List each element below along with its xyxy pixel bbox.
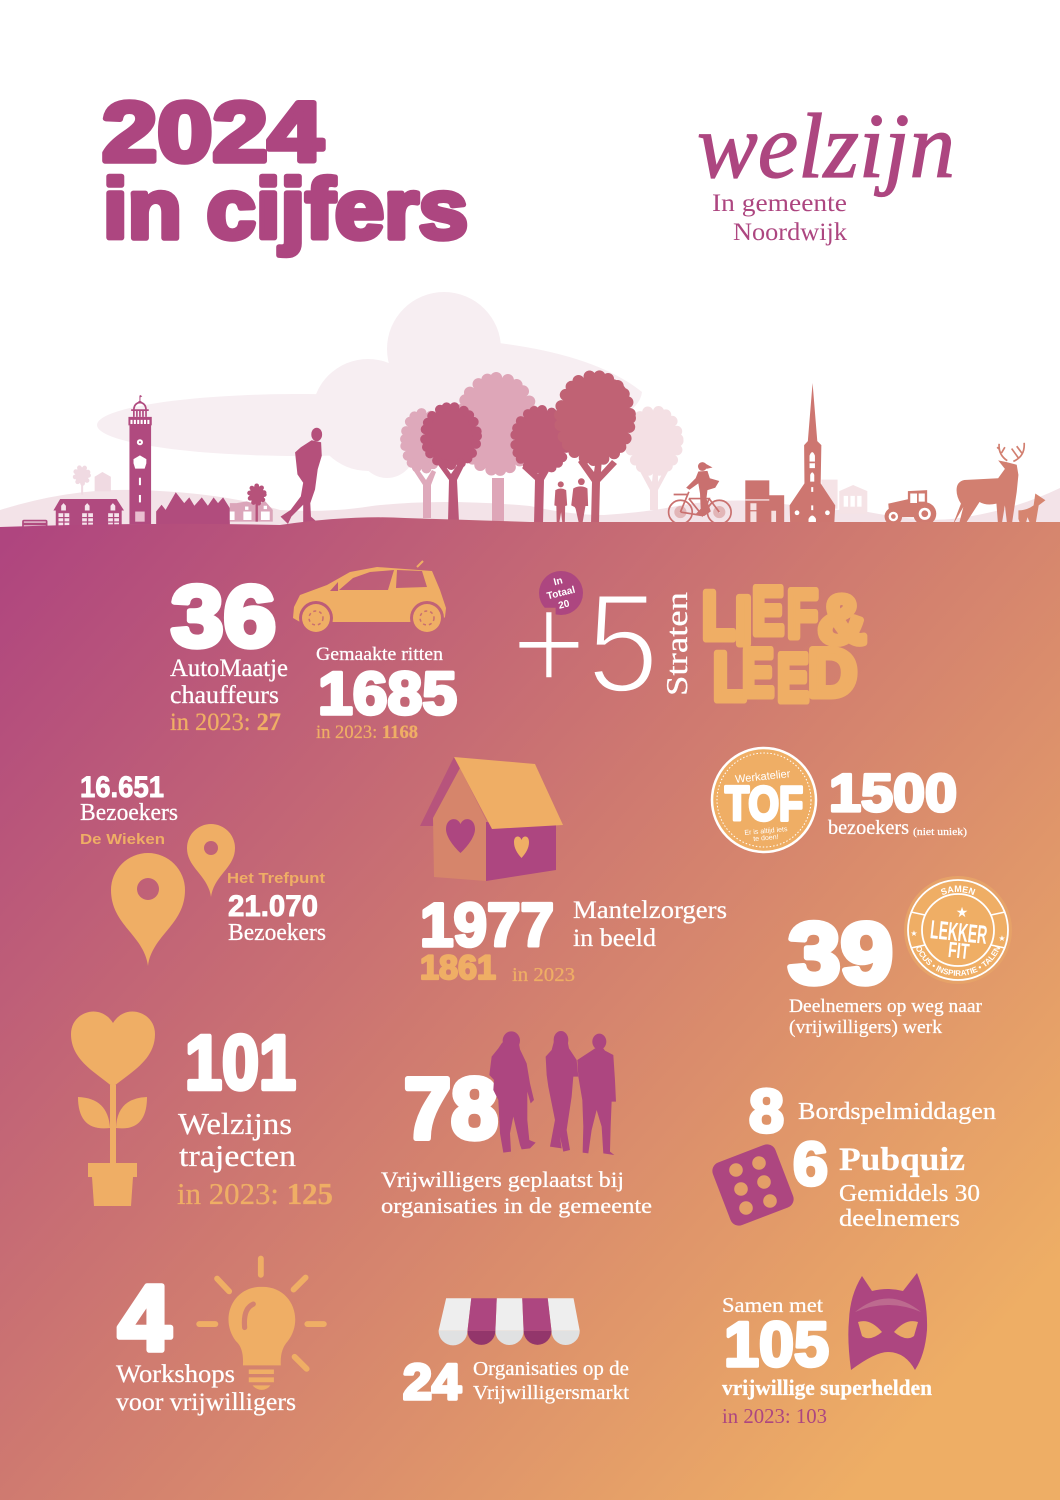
- deer: [952, 443, 1045, 526]
- logo: Lief & Leed: I: [735, 583, 752, 659]
- stat: 8 bordspelmiddagen: [749, 1077, 996, 1145]
- dark tree 3: [560, 376, 630, 524]
- badge: Werkatelier TOF: TOF: [725, 778, 803, 831]
- title: in cijfers: [103, 162, 468, 256]
- stat: 1977 mantelzorgers: 1861: [420, 949, 496, 987]
- stat: 39 deelnemers: Deelnemers op weg naar: [789, 996, 983, 1017]
- cloud: [97, 292, 642, 478]
- stat: 4 workshops: 4: [118, 1266, 171, 1370]
- dark tree 1: [425, 407, 477, 522]
- title: [102, 85, 468, 256]
- badge: Samen Lekker Fit: FOCUS • INSPIRATIE • TALENT: [916, 946, 1000, 976]
- stat: 4 workshops: [116, 1266, 296, 1416]
- badge: Samen Lekker Fit: FIT: [947, 937, 971, 964]
- stat: De Wieken: Bezoekers: [80, 800, 178, 826]
- stat: 24 organisaties: [403, 1354, 629, 1410]
- logo: Lief & Leed: L: [713, 639, 746, 715]
- stat: 105 superhelden: vrijwillige superhelden: [722, 1375, 932, 1400]
- icon: dice: [710, 1142, 796, 1228]
- dark tree 2: [515, 410, 567, 524]
- trees: [405, 376, 678, 524]
- logo: Lief & Leed: &: [818, 582, 866, 658]
- stat: 105 superhelden: in 2023: 103: [722, 1404, 827, 1428]
- people silhouettes: [489, 1031, 616, 1155]
- stat: 101 welzijns trajecten: [177, 1020, 333, 1211]
- text: vrijwilligers geplaatst: Vrijwilligers geplaatst bij: [381, 1167, 624, 1192]
- text: vrijwilligers geplaatst: organisaties in de gemeente: [381, 1193, 652, 1218]
- stat: 1977 mantelzorgers: 1977: [420, 891, 554, 959]
- stat: 6 pubquiz: deelnemers: [839, 1206, 960, 1232]
- stat: 105 superhelden: Samen met: [722, 1293, 823, 1317]
- stat: De Wieken: De Wieken: [80, 831, 165, 848]
- stat: 1977 mantelzorgers: in beeld: [573, 925, 657, 952]
- stat: 36 AutoMaatje chauffeurs: [170, 569, 288, 736]
- stat: 6 pubquiz: Gemiddels 30: [839, 1181, 980, 1207]
- stat: 1500 bezoekers: [828, 764, 967, 839]
- stat: 1685 gemaakte ritten: 1685: [318, 660, 457, 727]
- icon: small map pin: [187, 824, 235, 897]
- logo: Lief & Leed: E: [752, 573, 784, 649]
- logo: welzijn: welzijn: [697, 95, 955, 197]
- badge: in totaal 20: 20: [557, 598, 571, 612]
- light tree left: [405, 413, 441, 518]
- icon: house with hearts: [420, 757, 563, 881]
- stat: 36 AutoMaatje chauffeurs: chauffeurs: [170, 682, 279, 709]
- badge: Werkatelier TOF: Werkatelier: [735, 768, 791, 786]
- logo: welzijn: In gemeente: [712, 190, 847, 217]
- stat: 1685 gemaakte ritten: Gemaakte ritten: [316, 644, 444, 665]
- square houses: [745, 480, 784, 526]
- bus: [23, 521, 47, 529]
- icon: market awning: [439, 1298, 580, 1345]
- skyline right: [554, 383, 1045, 526]
- cyclist: [669, 462, 731, 524]
- stat: 78 number: 78: [404, 1061, 498, 1157]
- stat: 36 AutoMaatje chauffeurs: 36: [171, 569, 276, 665]
- stat: 6 pubquiz: Pubquiz: [839, 1142, 965, 1178]
- walker: [281, 428, 322, 524]
- pale hills: [0, 488, 1060, 530]
- stat: 1977 mantelzorgers: Mantelzorgers: [573, 897, 727, 924]
- gradient ground: [0, 517, 1060, 1500]
- logo: Lief & Leed: L: [702, 578, 735, 654]
- pink houses: [230, 501, 273, 522]
- pale tree and house: [75, 467, 111, 495]
- stat: 39 deelnemers: (vrijwilligers) werk: [789, 1017, 943, 1038]
- stat: 101 welzijns trajecten: trajecten: [179, 1138, 297, 1173]
- stat: 1977 mantelzorgers: [420, 891, 727, 987]
- logo: welzijn: [697, 95, 955, 246]
- badge: Samen Lekker Fit: ★: [998, 934, 1006, 943]
- stat: Het Trefpunt: Het Trefpunt: [227, 870, 325, 887]
- badge: in totaal 20: In: [553, 575, 564, 588]
- badge: Samen Lekker Fit: ★: [956, 905, 968, 921]
- stat: 105 superhelden: 105: [724, 1310, 829, 1380]
- stat: 6 pubquiz: [793, 1130, 980, 1232]
- stat: +5 straten: +5: [511, 564, 659, 723]
- badge: Samen Lekker Fit: [904, 876, 1012, 984]
- logo: Lief & Leed: [702, 573, 866, 716]
- small tree: [249, 486, 264, 522]
- stat: Het Trefpunt: Bezoekers: [228, 920, 326, 946]
- icon: car: [293, 561, 446, 635]
- tractor: [885, 490, 936, 525]
- stat: 8 bordspelmiddagen: 8: [749, 1077, 784, 1145]
- church: [790, 383, 835, 526]
- stat: Het Trefpunt: 21.070: [228, 890, 318, 923]
- stat: De Wieken: [80, 771, 178, 848]
- school building: [53, 499, 124, 532]
- badge: Werkatelier TOF: [712, 748, 816, 852]
- badge: Werkatelier TOF: Er is altijd iets: [744, 826, 788, 837]
- stat: 36 AutoMaatje chauffeurs: in 2023: 27: [170, 709, 281, 736]
- stat: 36 AutoMaatje chauffeurs: AutoMaatje: [170, 655, 288, 682]
- big pink tree: [460, 378, 534, 524]
- pale tree right: [630, 411, 678, 510]
- badge: Samen Lekker Fit: ★: [910, 929, 918, 938]
- badge: in totaal 20: [539, 571, 583, 615]
- logo: Lief & Leed: D: [808, 635, 857, 711]
- stat: 1685 gemaakte ritten: [316, 644, 457, 743]
- logo: Lief & Leed: E: [777, 640, 809, 716]
- badge: Samen Lekker Fit: LEKKER: [929, 914, 989, 950]
- logo: welzijn: Noordwijk: [733, 219, 848, 246]
- stat: 24 organisaties: Organisaties op de: [473, 1358, 629, 1380]
- stat: 6 pubquiz: 6: [793, 1130, 828, 1198]
- stat: 39 deelnemers: [788, 906, 983, 1038]
- badge: in totaal 20: Totaal: [546, 585, 577, 602]
- logo: Lief & Leed: E: [742, 635, 774, 711]
- gabled houses: [156, 492, 230, 525]
- icon: superhero mask: [848, 1273, 927, 1370]
- icon: light bulb: [199, 1259, 324, 1390]
- stat: 1977 mantelzorgers: in 2023: [512, 964, 575, 986]
- stat: 4 workshops: Workshops: [116, 1361, 235, 1388]
- stat: Het Trefpunt: [227, 870, 326, 946]
- stat: 24 organisaties: 24: [403, 1354, 461, 1410]
- badge: Samen Lekker Fit: SAMEN: [941, 886, 976, 896]
- stat: 105 superhelden: [722, 1293, 932, 1428]
- stat: 24 organisaties: Vrijwilligersmarkt: [473, 1382, 629, 1404]
- title: 2024: [102, 85, 323, 179]
- skyline left: lighthouse and village: [23, 395, 322, 532]
- stat: 101 welzijns trajecten: 101: [185, 1020, 296, 1106]
- pale buildings: [821, 480, 867, 514]
- stat: 1500 bezoekers: bezoekers: [828, 817, 909, 839]
- badge: Werkatelier TOF: te doen!: [753, 834, 779, 843]
- stat: 1500 bezoekers: (niet uniek): [913, 826, 967, 838]
- two people walking: [554, 478, 588, 524]
- stat: De Wieken: 16.651: [80, 771, 164, 804]
- stat: 101 welzijns trajecten: in 2023: 125: [177, 1176, 333, 1211]
- text: vrijwilligers geplaatst: [381, 1167, 652, 1218]
- stat: 4 workshops: voor vrijwilligers: [116, 1389, 296, 1416]
- lighthouse: [128, 395, 152, 524]
- stat: 1685 gemaakte ritten: in 2023: 1168: [316, 722, 418, 743]
- stat: 8 bordspelmiddagen: Bordspelmiddagen: [798, 1099, 996, 1125]
- icon: heart flower in pot: [71, 1011, 155, 1206]
- icon: large map pin: [111, 853, 185, 966]
- stat: 39 deelnemers: 39: [788, 906, 893, 1002]
- stat: 1500 bezoekers: 1500: [829, 764, 957, 823]
- stat: +5 straten: Straten: [659, 591, 694, 696]
- logo: Lief & Leed: F: [787, 576, 818, 652]
- stat: 101 welzijns trajecten: Welzijns: [178, 1106, 292, 1141]
